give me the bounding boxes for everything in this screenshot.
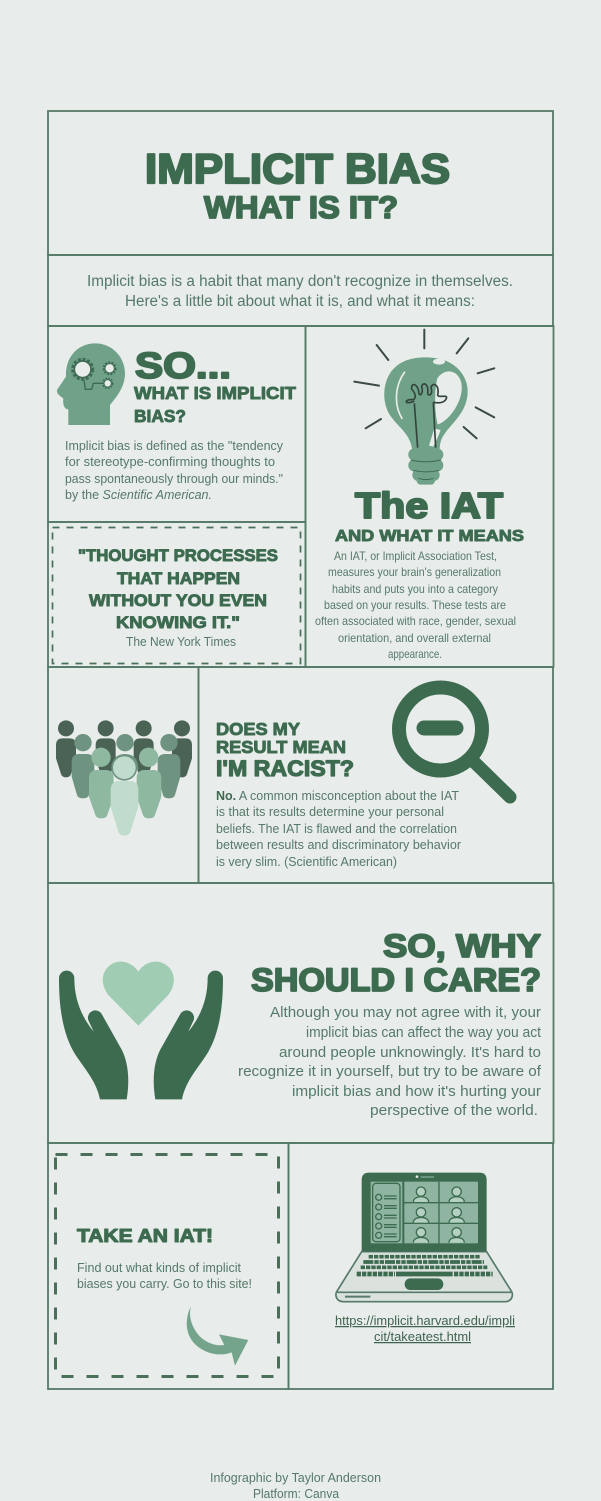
link text: https://implicit.harvard.edu/impli	[335, 1314, 515, 1328]
heading: what is implicit bias: WHAT IS IMPLICIT	[134, 383, 296, 403]
body text: implicit bias can affect the way you act	[306, 1024, 542, 1041]
IAT body text: based on your results. These tests are	[324, 599, 506, 612]
icon: group of people	[56, 720, 192, 836]
IAT body text: habits and puts you into a category	[332, 583, 498, 596]
footer credit: Infographic by Taylor Anderson	[210, 1471, 381, 1485]
definition text	[65, 439, 284, 502]
panel: why should I care	[59, 928, 542, 1119]
intro text: Implicit bias is a habit that many don't recognize in themselves.	[87, 273, 513, 290]
body text: biases you carry. Go to this site!	[77, 1277, 252, 1291]
panel: does my result mean	[216, 688, 510, 869]
footer credit	[210, 1471, 381, 1501]
body text: around people unknowingly. It's hard to	[279, 1044, 541, 1061]
title: WHAT IS IT?	[204, 189, 398, 225]
body text: is very slim. (Scientific American)	[216, 855, 397, 869]
panel: quote	[52, 528, 300, 664]
icon: head with gears	[57, 343, 125, 425]
IAT body text: appearance.	[388, 648, 442, 661]
title: IMPLICIT BIAS	[145, 145, 450, 192]
panel: what is implicit bias	[57, 343, 296, 502]
intro text: Here's a little bit about what it is, and what it means:	[125, 293, 475, 310]
body text: perspective of the world.	[370, 1102, 538, 1119]
body text	[77, 1261, 252, 1291]
icon: light bulb	[354, 330, 494, 485]
heading: the IAT: The IAT	[355, 485, 503, 526]
IAT body text: measures your brain's generalization	[328, 566, 501, 579]
heading: RESULT MEAN	[216, 737, 346, 757]
body text	[216, 789, 461, 869]
definition text: pass spontaneously through our minds."	[65, 472, 283, 486]
heading: so: SO...	[135, 345, 231, 386]
heading: what is implicit bias: BIAS?	[134, 406, 186, 426]
title	[145, 145, 450, 225]
IAT body text: An IAT, or Implicit Association Test,	[334, 550, 497, 563]
panel: link to test	[335, 1173, 515, 1344]
quote text: KNOWING IT."	[116, 614, 240, 632]
footer credit: Platform: Canva	[253, 1487, 339, 1501]
heading	[216, 719, 354, 781]
quote text: WITHOUT YOU EVEN	[89, 592, 267, 610]
body text: No. A common misconception about the IAT	[216, 789, 459, 803]
heading: SO, WHY	[383, 928, 541, 964]
icon: magnifying glass	[399, 688, 510, 797]
definition text: by the Scientific American.	[65, 488, 212, 502]
IAT body text	[315, 550, 516, 661]
definition text: Implicit bias is defined as the "tendency	[65, 439, 284, 453]
body text: beliefs. The IAT is flawed and the correlation	[216, 822, 457, 836]
heading: I'M RACIST?	[216, 756, 354, 781]
icon: curved arrow	[187, 1306, 248, 1366]
quote text: THAT HAPPEN	[117, 570, 240, 588]
definition text: for stereotype-confirming thoughts to	[65, 455, 275, 469]
quote text	[78, 547, 278, 632]
body text	[238, 1004, 542, 1119]
panel: the IAT	[315, 330, 524, 661]
panel: take an IAT	[56, 1154, 278, 1376]
body text: between results and discriminatory behavior	[216, 838, 461, 852]
quote text: "THOUGHT PROCESSES	[78, 547, 278, 565]
IAT body text: often associated with race, gender, sexual	[315, 615, 516, 628]
link text	[335, 1314, 515, 1344]
body text: Although you may not agree with it, your	[270, 1004, 541, 1021]
body text: implicit bias and how it's hurting your	[292, 1083, 541, 1100]
body text: Find out what kinds of implicit	[77, 1261, 242, 1275]
heading: DOES MY	[216, 719, 300, 739]
subheading: AND WHAT IT MEANS	[335, 528, 524, 545]
icon: hands holding heart	[59, 962, 223, 1099]
intro text	[87, 273, 513, 310]
IAT body text: orientation, and overall external	[338, 632, 491, 645]
body text: is that its results determine your personal	[216, 805, 444, 819]
heading: SHOULD I CARE?	[251, 962, 541, 998]
heading	[251, 928, 541, 998]
quote source: The New York Times	[126, 635, 236, 649]
body text: recognize it in yourself, but try to be aware of	[238, 1063, 542, 1080]
link text: cit/takeatest.html	[374, 1330, 471, 1344]
heading: TAKE AN IAT!	[77, 1225, 213, 1246]
icon: laptop with video call	[336, 1173, 512, 1302]
heading: what is implicit bias	[134, 383, 296, 426]
